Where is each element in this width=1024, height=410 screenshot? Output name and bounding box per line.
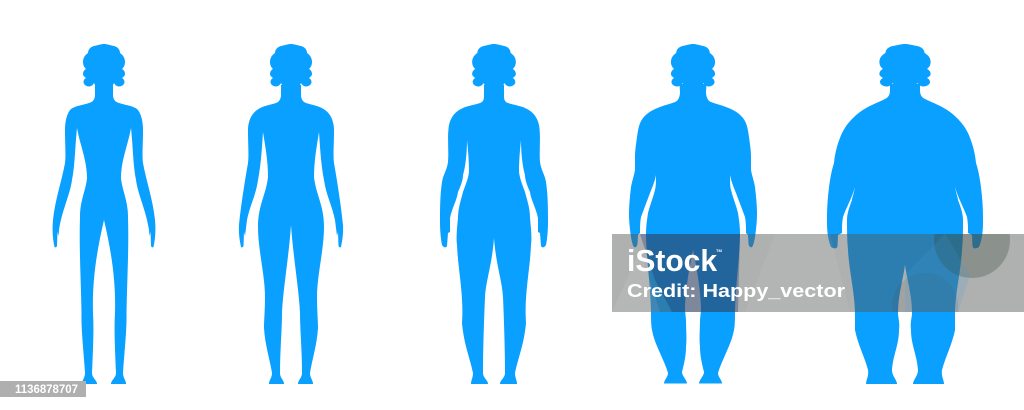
figure 4: obese body silhouette — [629, 44, 757, 384]
image id tag — [0, 381, 86, 397]
figure 3: overweight body silhouette — [440, 44, 548, 384]
watermark banner — [612, 234, 1024, 312]
figure 5: severely obese body silhouette — [827, 44, 983, 384]
credit line: Credit: Happy_vector — [627, 280, 845, 301]
trademark mark: TM — [716, 248, 722, 253]
iStock logo text: iStock — [627, 243, 718, 278]
image id tag: 1136878707 — [15, 384, 78, 396]
figure 1: slim body silhouette — [53, 44, 155, 384]
figure 2: average body silhouette — [239, 44, 343, 384]
